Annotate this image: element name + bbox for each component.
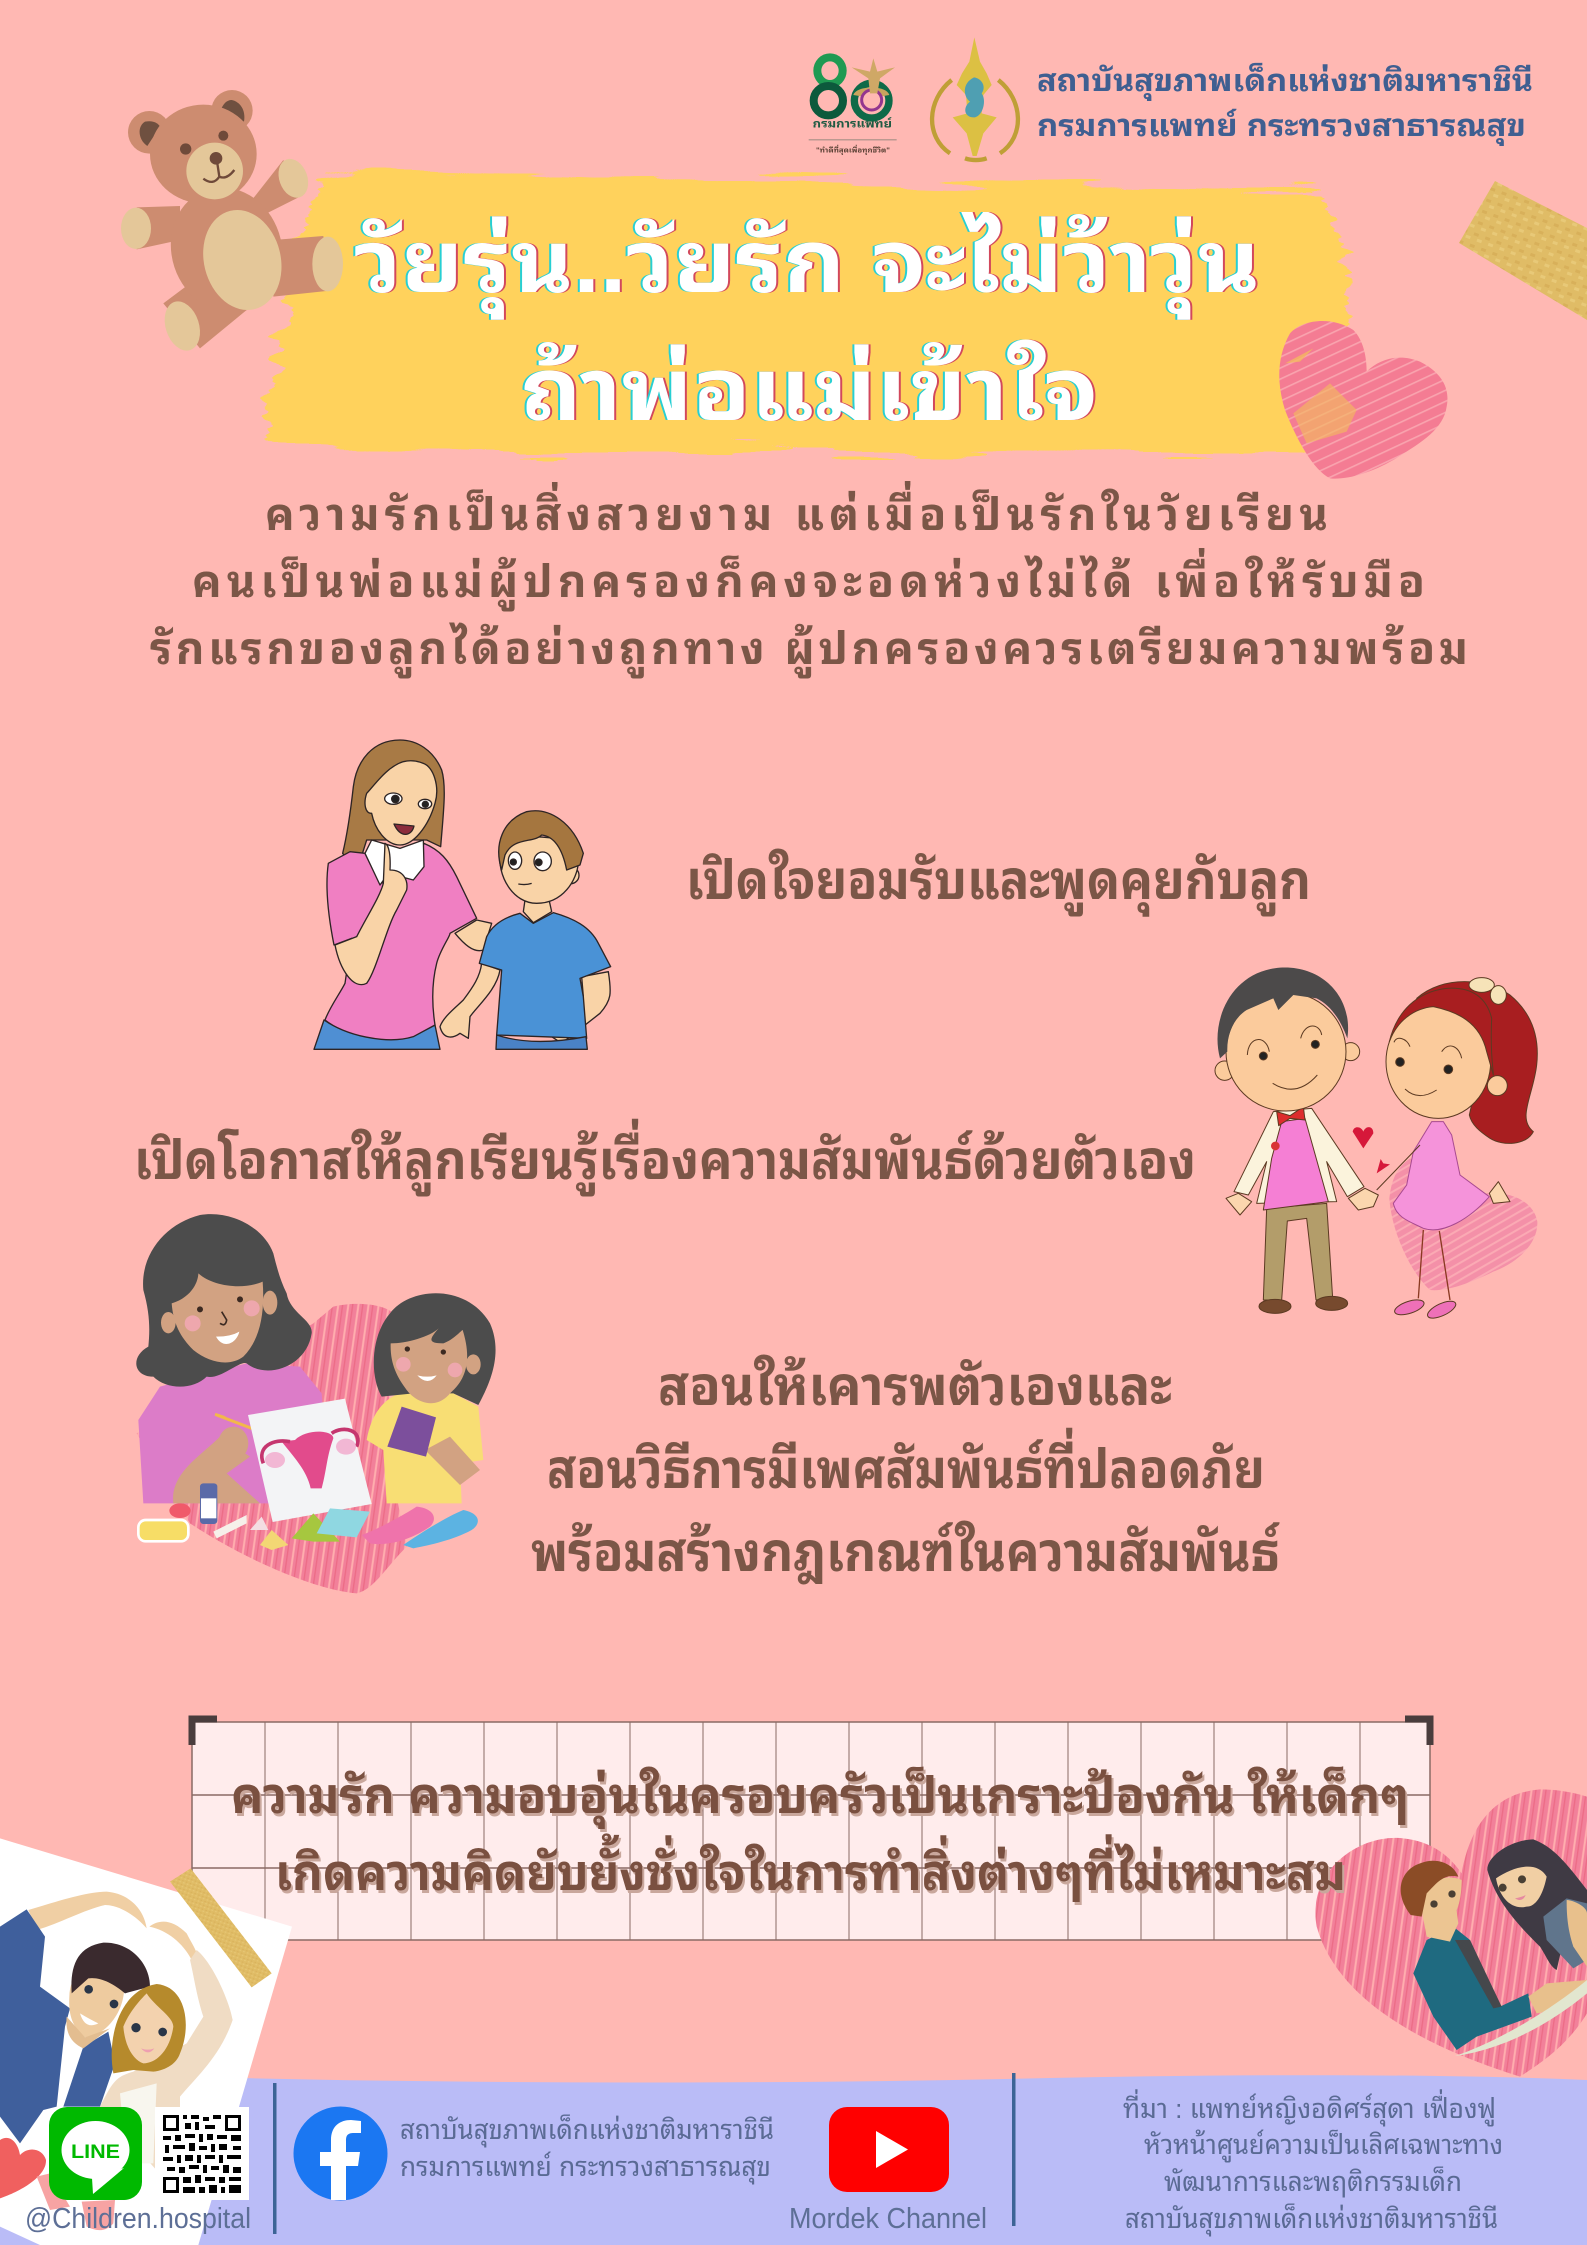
closing message bbox=[231, 1765, 1409, 1902]
hospital name header bbox=[1037, 62, 1533, 146]
icon: LINE: LINE bbox=[71, 2142, 120, 2163]
social handle: @Children.hospital bbox=[25, 2203, 251, 2235]
teddy bear bbox=[121, 90, 343, 355]
step 3 text: สอนให้เคารพตัวเองและ bbox=[658, 1355, 1172, 1417]
hospital name header: กรมการแพทย์ กระทรวงสาธารณสุข bbox=[1037, 109, 1526, 146]
closing message: ความรัก ความอบอุ่นในครอบครัวเป็นเกราะป้องกัน ให้เด็กๆ bbox=[231, 1765, 1409, 1830]
closing message: เกิดความคิดยับยั้งชั่งใจในการทำสิ่งต่างๆที่ไม่เหมาะสม bbox=[275, 1833, 1346, 1902]
title: วัยรุ่น..วัยรัก จะไม่ว้าวุ่น bbox=[354, 212, 1260, 320]
intro paragraph: คนเป็นพ่อแม่ผู้ปกครองก็คงจะอดห่วงไม่ได้ เพื่อให้รับมือ bbox=[192, 547, 1425, 611]
step 3 text: สอนวิธีการมีเพศสัมพันธ์ที่ปลอดภัย bbox=[547, 1427, 1265, 1500]
logo: 80 years: "ทำดีที่สุดเพื่อทุกชีวิต" bbox=[816, 145, 890, 156]
title: ถ้าพ่อแม่เข้าใจ bbox=[521, 340, 1098, 439]
source credit: หัวหน้าศูนย์ความเป็นเลิศเฉพาะทาง bbox=[1144, 2129, 1503, 2163]
illustration: young couple holding hands bbox=[1215, 968, 1537, 1322]
icon: LINE bbox=[49, 2107, 142, 2200]
step 1 text: เปิดใจยอมรับและพูดคุยกับลูก bbox=[686, 849, 1311, 917]
yellow brush banner bbox=[262, 170, 1350, 452]
divider bbox=[1012, 2073, 1016, 2226]
hospital name header: สถาบันสุขภาพเด็กแห่งชาติมหาราชินี bbox=[1037, 62, 1533, 101]
graph paper panel bbox=[192, 1719, 1430, 1940]
QR code bbox=[155, 2107, 249, 2200]
footer band bbox=[0, 2075, 1587, 2245]
intro paragraph: รักแรกของลูกได้อย่างถูกทาง ผู้ปกครองควรเตรียมความพร้อม bbox=[150, 623, 1468, 678]
title bbox=[354, 212, 1260, 439]
intro paragraph: ความรักเป็นสิ่งสวยงาม แต่เมื่อเป็นรักในวัยเรียน bbox=[265, 480, 1328, 540]
Facebook page name: สถาบันสุขภาพเด็กแห่งชาติมหาราชินี bbox=[400, 2114, 774, 2147]
tape top right bbox=[1459, 181, 1587, 320]
intro paragraph bbox=[150, 480, 1468, 678]
logo: royal emblem bbox=[932, 37, 1018, 160]
illustration: mother and son bbox=[314, 740, 611, 1049]
step 3 text: พร้อมสร้างกฎเกณฑ์ในความสัมพันธ์ bbox=[531, 1521, 1280, 1584]
source credit: พัฒนาการและพฤติกรรมเด็ก bbox=[1164, 2166, 1462, 2197]
source credit: ที่มา : แพทย์หญิงอดิศร์สุดา เฟื่องฟู bbox=[1123, 2089, 1496, 2127]
heart scribble and couple bottom right bbox=[1315, 1789, 1587, 2077]
heart scribble top right bbox=[1279, 321, 1447, 479]
icon: Facebook bbox=[294, 2106, 388, 2200]
step 3 text bbox=[531, 1355, 1280, 1584]
source credit: สถาบันสุขภาพเด็กแห่งชาติมหาราชินี bbox=[1125, 2203, 1498, 2236]
photo card: couple making heart bbox=[0, 1838, 292, 2245]
Facebook page name: กรมการแพทย์ กระทรวงสาธารณสุข bbox=[400, 2152, 771, 2184]
divider bbox=[273, 2083, 276, 2234]
logo: 80 years: กรมการแพทย์ bbox=[813, 115, 892, 130]
illustration: mother and daughter with anatomy chart bbox=[136, 1214, 496, 1593]
source credit bbox=[1123, 2089, 1503, 2236]
step 2 text: เปิดโอกาสให้ลูกเรียนรู้เรื่องความสัมพันธ์ด้วยตัวเอง bbox=[134, 1118, 1196, 1197]
icon: YouTube bbox=[829, 2107, 949, 2192]
YouTube channel name: Mordek Channel bbox=[789, 2203, 987, 2235]
Facebook page name bbox=[400, 2114, 774, 2184]
logo: 80 years bbox=[809, 57, 897, 156]
